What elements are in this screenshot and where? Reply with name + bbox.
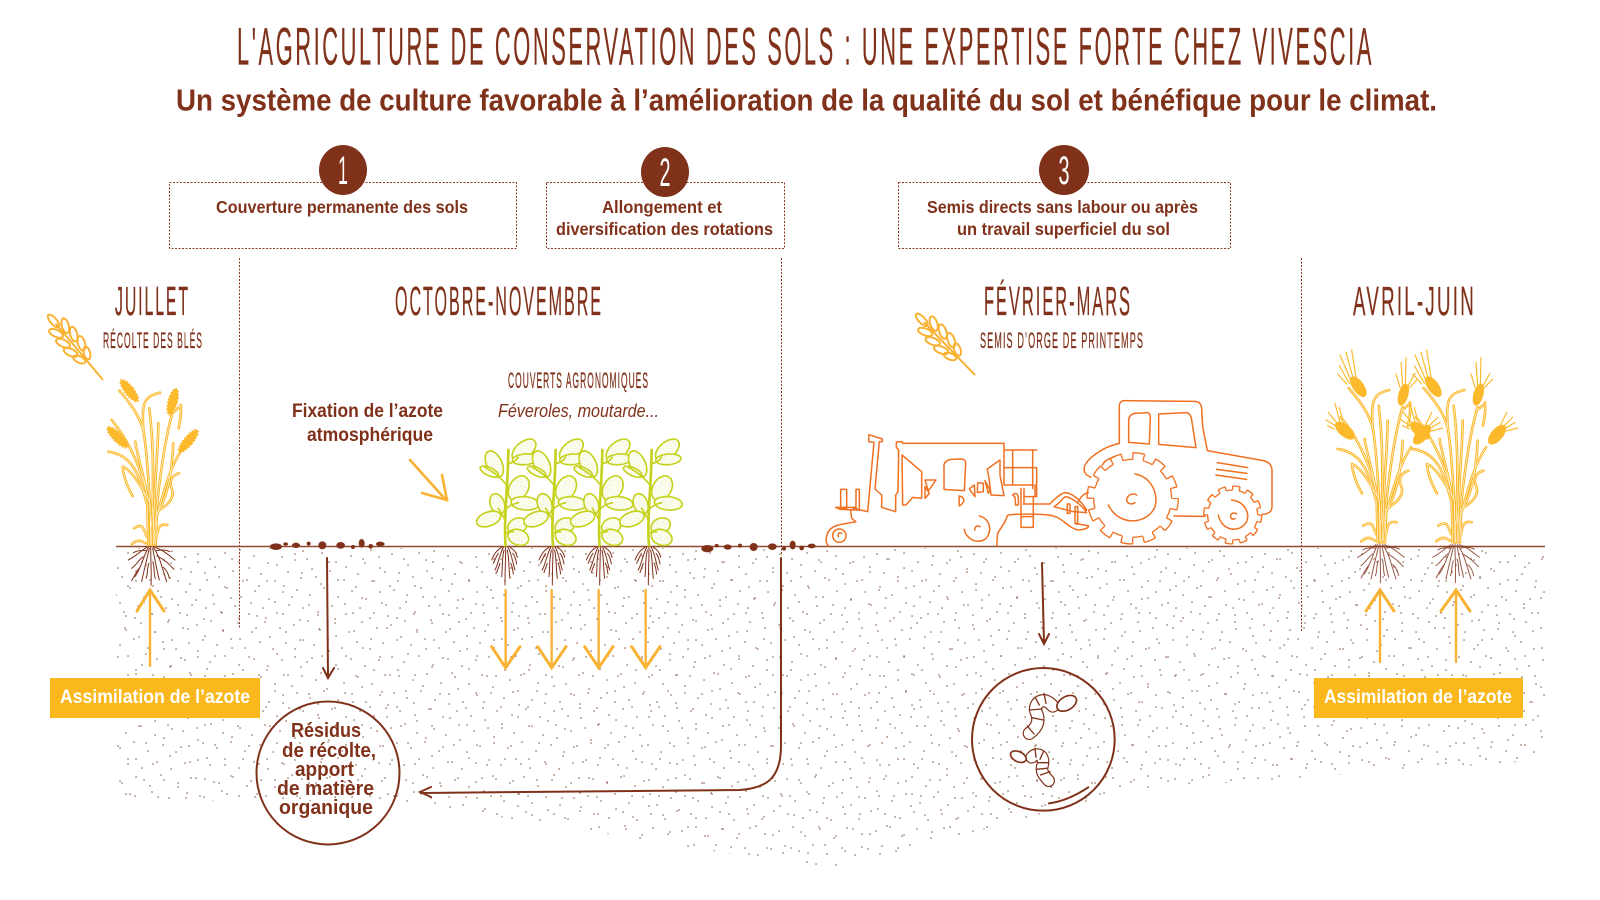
step 2: 2 [660,151,670,195]
arrow: assimilation up left [137,590,164,666]
step 3 [927,145,1198,239]
arrow: organic matter return [420,558,781,797]
circle: earthworms [972,668,1115,811]
label: assimilation left [50,678,260,718]
infographic: FÉVRIER-MARS [984,278,1132,324]
step 2: Allongement et [602,197,722,217]
label: fixation de l'azote: Fixation de l’azote [292,401,443,422]
clods right [701,541,816,552]
circle: residues: de matière [277,778,374,800]
arrow: residues down [323,558,334,678]
circle: residues: apport [295,759,354,781]
soil stipple [116,548,1545,870]
infographic: COUVERTS AGRONOMIQUES [508,368,649,393]
step 1: 1 [338,149,348,193]
icon: barley sprig [907,305,984,384]
label: fixation de l'azote: atmosphérique [307,425,433,446]
subtitle: Un système de culture favorable à l’amélioration de la qualité du sol et bénéfique pour le climat. [176,82,1437,118]
circle: residues: de récolte, [282,740,376,762]
arrows: assimilation up right [1366,590,1470,662]
label: fixation de l'azote [292,401,443,446]
circle: residues [256,702,400,844]
tractor and seeder [826,401,1272,546]
arrows: nitrogen down [492,590,660,668]
step 3: 3 [1058,149,1070,193]
infographic: SEMIS D’ORGE DE PRINTEMPS [980,328,1144,353]
circle: residues: Résidus [291,720,361,742]
label: assimilation left: Assimilation de l’azote [60,687,250,708]
infographic: RÉCOLTE DES BLÉS [103,328,203,353]
label: assimilation right: Assimilation de l’azote [1324,687,1512,708]
arrow: diagonal nitrogen [410,460,447,500]
step 1: Couverture permanente des sols [216,197,468,217]
infographic: JUILLET [115,278,190,324]
infographic: OCTOBRE-NOVEMBRE [395,278,603,324]
worm two [1009,748,1050,781]
cover crop plants [474,435,683,585]
label: féveroles, moutarde: Féveroles, moutarde... [498,401,659,421]
wheat plant left [105,377,201,585]
arrow: soil life down [1039,563,1049,644]
step 3: Semis directs sans labour ou après [927,197,1198,217]
step 2: diversification des rotations [556,219,773,239]
clods left [270,539,385,550]
wheat plants right [1326,350,1518,583]
label: assimilation right [1314,678,1523,718]
worm one [1027,692,1079,734]
step 3: un travail superficiel du sol [957,219,1170,239]
step 1 [216,145,468,217]
ground line [116,546,1545,548]
step 2 [556,147,773,239]
circle: residues: organique [279,797,373,819]
icon: wheat sprig left [38,306,113,388]
